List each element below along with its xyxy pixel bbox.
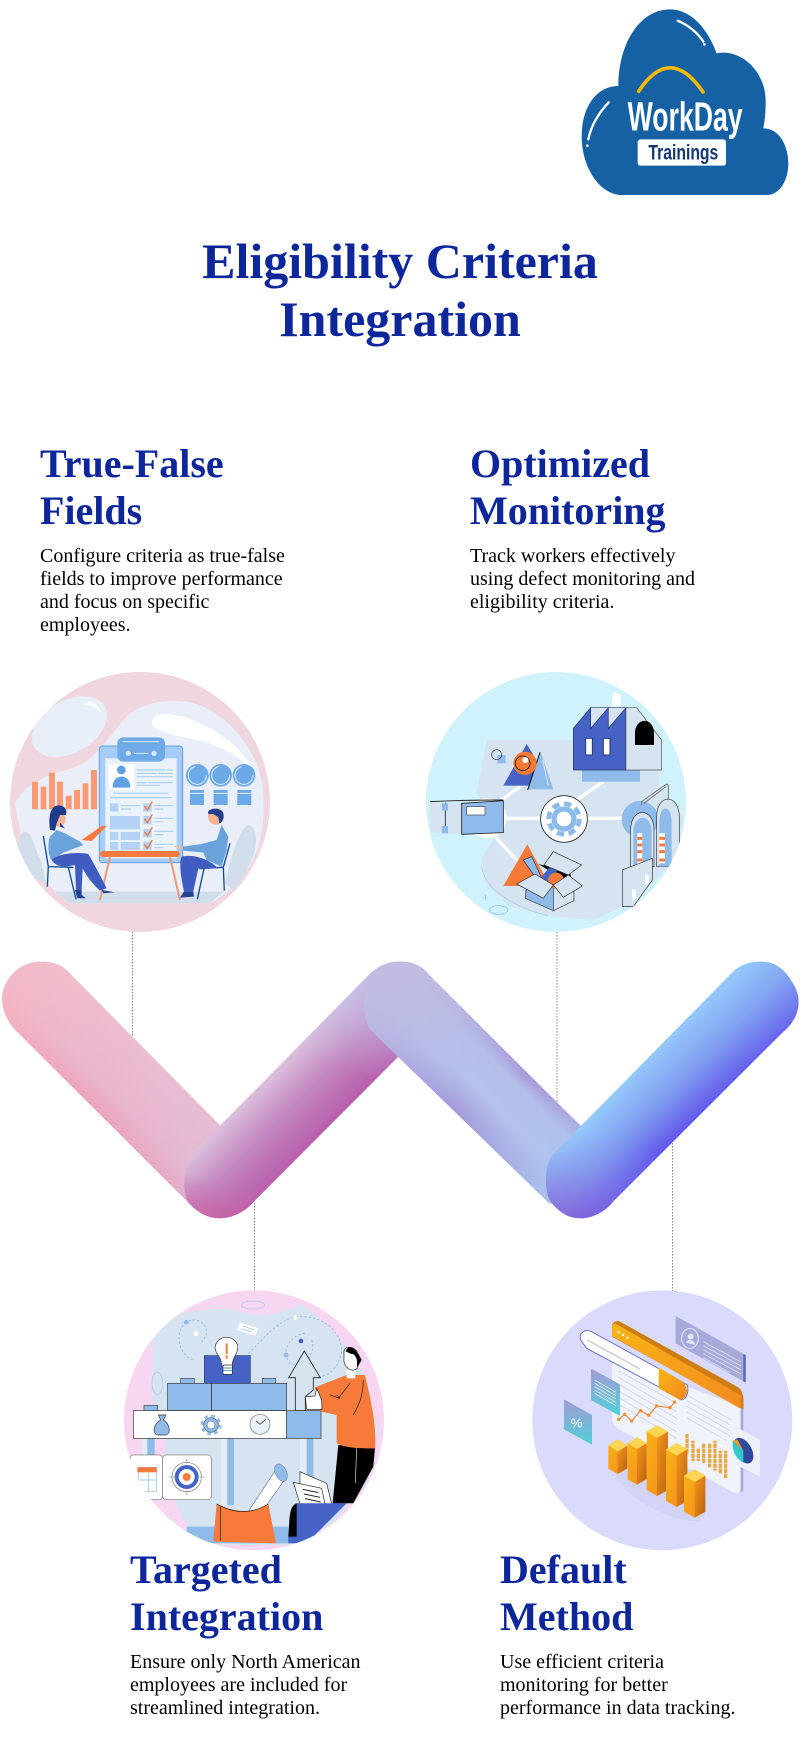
text: True-False description: fields to improve performance (40, 568, 283, 590)
W zigzag ribbon (2, 962, 799, 1218)
title: Eligibility Criteria (202, 233, 598, 289)
text: True-False description (40, 545, 285, 636)
text: Targeted Integration description: streamlined integration. (130, 1697, 320, 1719)
illustration: factory monitoring network (426, 672, 686, 932)
text: True-False description: Configure criteria as true-false (40, 545, 285, 567)
logo: WorkDay Trainings cloud: Trainings (648, 140, 718, 164)
text: Default Method description: monitoring for better (500, 1674, 668, 1696)
text: Default Method description: performance in data tracking. (500, 1697, 735, 1719)
connector lines (132, 932, 672, 1291)
text: True-False description: and focus on specific (40, 591, 209, 613)
heading: Optimized Monitoring: Monitoring (470, 488, 666, 533)
text: Targeted Integration description (130, 1651, 360, 1719)
illustration: analytics dashboard (532, 1290, 792, 1550)
heading: Targeted Integration: Integration (130, 1594, 323, 1639)
heading: True-False Fields (40, 441, 224, 533)
text: Optimized Monitoring description (470, 545, 695, 613)
illustration: recruiters reviewing checklist (10, 672, 270, 932)
logo: WorkDay Trainings cloud (582, 9, 788, 195)
text: Optimized Monitoring description: Track workers effectively (470, 545, 676, 567)
title: Integration (279, 291, 521, 347)
heading: Optimized Monitoring (470, 441, 666, 533)
text: Optimized Monitoring description: using defect monitoring and (470, 568, 695, 590)
illustration: analytics dashboard: % (571, 1415, 583, 1430)
text: Targeted Integration description: Ensure only North American (130, 1651, 360, 1673)
heading: Targeted Integration (130, 1547, 323, 1639)
text: Targeted Integration description: employees are included for (130, 1674, 347, 1696)
heading: True-False Fields: True-False (40, 441, 224, 486)
title (202, 233, 598, 347)
text: Default Method description: Use efficient criteria (500, 1651, 664, 1673)
text: Default Method description (500, 1651, 735, 1719)
heading: Optimized Monitoring: Optimized (470, 441, 650, 486)
heading: Default Method: Default (500, 1547, 627, 1592)
heading: True-False Fields: Fields (40, 488, 142, 533)
text: True-False description: employees. (40, 614, 131, 636)
illustration: targeted integration board (124, 1290, 384, 1550)
heading: Default Method: Method (500, 1594, 633, 1639)
heading: Default Method (500, 1547, 633, 1639)
logo: WorkDay Trainings cloud: WorkDay (628, 94, 743, 140)
heading: Targeted Integration: Targeted (130, 1547, 282, 1592)
text: Optimized Monitoring description: eligibility criteria. (470, 591, 614, 613)
